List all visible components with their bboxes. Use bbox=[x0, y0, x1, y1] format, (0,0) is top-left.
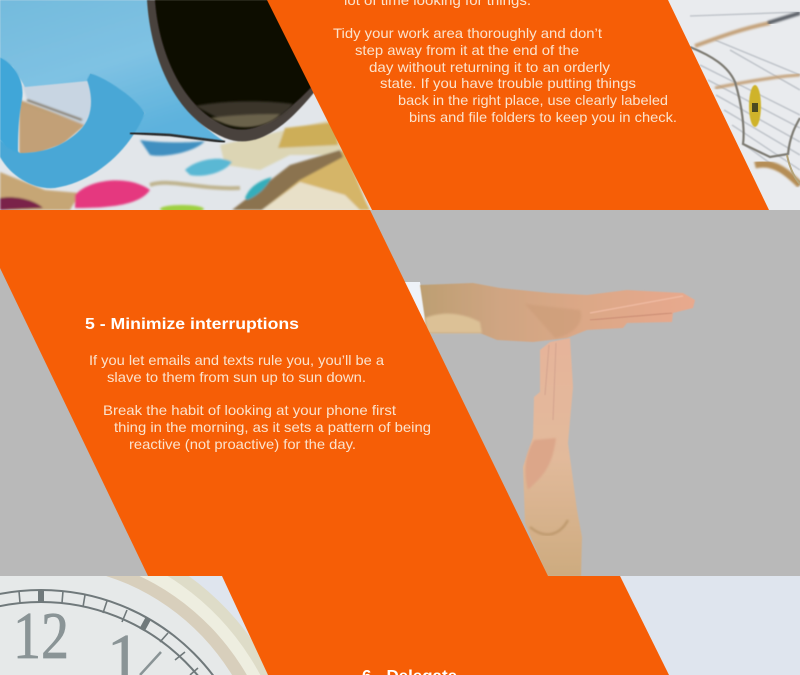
panel: orange band section 5 bbox=[0, 210, 548, 576]
mug handle hole bbox=[20, 80, 95, 154]
photo: spilled blue mug on papers bbox=[0, 0, 380, 213]
text block: section 4 body: back in the right place, use clearly labeled bbox=[398, 92, 668, 108]
text block: section 4 body: day without returning it to an orderly bbox=[369, 59, 610, 75]
icon: horizontal hand bbox=[420, 283, 695, 342]
section 6 background: wall with clock bbox=[0, 576, 800, 675]
text block: section 5 body: thing in the morning, as it sets a pattern of being bbox=[114, 419, 431, 435]
text block: section 4 body: bins and file folders to keep you in check. bbox=[409, 109, 677, 125]
mug opening bbox=[147, 0, 320, 141]
text block: section 4 body: Tidy your work area thoroughly and don’t bbox=[333, 25, 602, 41]
spectacle frame bbox=[690, 47, 800, 157]
icon: vertical hand bbox=[523, 338, 582, 576]
text block: section 5 body bbox=[89, 352, 431, 452]
text block: section 4 body: step away from it at the end of the bbox=[355, 42, 579, 58]
text block: section 4 body bbox=[333, 25, 677, 125]
text block: section 5 body: slave to them from sun up to sun down. bbox=[107, 369, 366, 385]
panel: orange band section 4 bbox=[267, 0, 769, 210]
text block: section 5 body: Break the habit of looking at your phone first bbox=[103, 402, 396, 418]
photo: glasses on open book bbox=[660, 0, 800, 210]
text block: section 4 body: state. If you have trouble putting things bbox=[380, 75, 636, 91]
heading: section 5: 5 - Minimize interruptions bbox=[85, 316, 299, 333]
text block: section 5 body: reactive (not proactive) for the day. bbox=[129, 436, 356, 452]
clock numerals: 12 bbox=[13, 599, 69, 673]
icon: clock metal rim bbox=[168, 576, 268, 675]
icon: white shirt cuff bbox=[400, 282, 428, 325]
mug body bbox=[0, 0, 225, 142]
icon: clock face bbox=[0, 576, 232, 675]
text block: section 5 body: If you let emails and texts rule you, you’ll be a bbox=[89, 352, 384, 368]
mug handle bbox=[0, 73, 145, 188]
section 5 background: grey with hands bbox=[0, 210, 800, 576]
panel: orange band section 6 bbox=[222, 576, 669, 675]
